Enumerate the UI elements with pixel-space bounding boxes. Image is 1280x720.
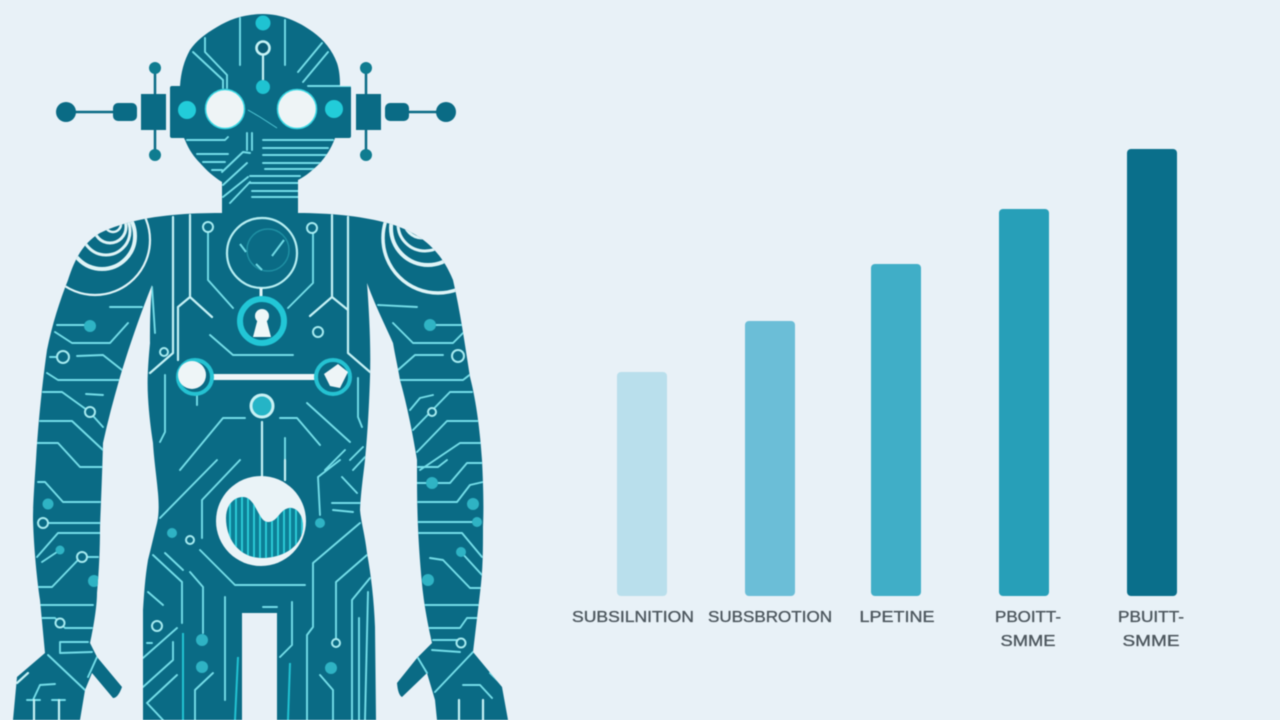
- right ear antenna: [356, 62, 456, 161]
- bar 5: [1127, 149, 1177, 596]
- bar 3: [871, 264, 921, 596]
- label 4: [995, 609, 1061, 650]
- left cheek dot: [178, 101, 196, 119]
- bar 2: [745, 321, 795, 596]
- label 1: SUBSILNITION: [572, 609, 694, 626]
- body silhouette: [13, 213, 508, 720]
- label 4: PBOITT-: [995, 609, 1061, 626]
- left arm traces: [27, 307, 142, 700]
- head top dot: [256, 16, 270, 30]
- right cheek dot: [325, 100, 343, 118]
- robot figure illustration: [13, 14, 508, 720]
- head circuits: [187, 18, 350, 203]
- belly circle: [216, 476, 306, 566]
- bar 1: [617, 372, 667, 596]
- right arm traces: [378, 305, 500, 698]
- body circuits: [17, 183, 500, 720]
- small core node: [251, 395, 273, 417]
- label 5: PBUITT-: [1118, 609, 1184, 626]
- left eye: [206, 90, 244, 128]
- head ring: [256, 42, 270, 54]
- shoulder rings: [64, 218, 456, 297]
- label 5: SMME: [1122, 633, 1180, 650]
- torso traces: [150, 215, 370, 373]
- chest connector bar: [178, 360, 350, 394]
- bar chart: [572, 149, 1184, 650]
- dots and rings: [84, 320, 96, 332]
- forehead dot: [256, 80, 270, 94]
- left ear antenna: [56, 62, 166, 161]
- chest circle: [227, 218, 297, 300]
- label 5: [1118, 609, 1184, 650]
- lock ring: [240, 299, 284, 343]
- right eye: [278, 90, 316, 128]
- head silhouette: [170, 14, 351, 213]
- label 2: SUBSBROTION: [708, 609, 832, 626]
- label 3: LPETINE: [860, 609, 934, 626]
- bar 4: [999, 209, 1049, 596]
- label 4: SMME: [1000, 633, 1056, 650]
